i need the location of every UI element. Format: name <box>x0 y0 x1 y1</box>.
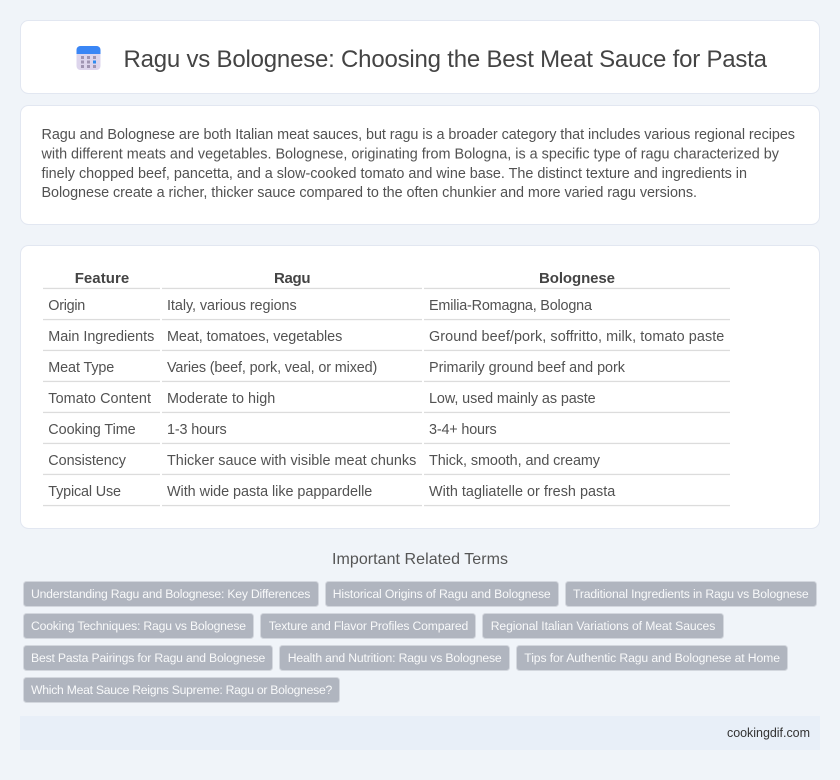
heading: related terms: Important Related Terms <box>332 551 508 568</box>
tag <box>482 614 724 638</box>
row: consistency: Thicker sauce with visible meat chunks <box>167 453 416 469</box>
row: tomato content: Low, used mainly as paste <box>429 391 596 407</box>
tag: Tips for Authentic Ragu and Bolognese at Home <box>524 651 780 665</box>
intro text: Bolognese create a richer, thicker sauce compared to the often chunkier and more varied ragu versions. <box>42 185 697 201</box>
tag: Health and Nutrition: Ragu vs Bolognese <box>288 651 502 665</box>
row: consistency <box>48 453 601 469</box>
table header <box>75 270 615 287</box>
row: main ingredients: Ground beef/pork, soffritto, milk, tomato paste <box>429 329 724 345</box>
row: cooking time: Cooking Time <box>48 422 136 438</box>
row: cooking time: 1-3 hours <box>167 422 227 438</box>
row: main ingredients <box>48 329 724 345</box>
tag <box>24 582 318 606</box>
tag: Historical Origins of Ragu and Bolognese <box>333 587 551 601</box>
intro text: Ragu and Bolognese are both Italian meat sauces, but ragu is a broader category that includes various regional recipes <box>42 127 795 143</box>
panel: header <box>20 20 820 94</box>
tag: Best Pasta Pairings for Ragu and Bolognese <box>31 651 266 665</box>
tag <box>24 646 272 670</box>
row: typical use: Typical Use <box>48 484 121 500</box>
row: tomato content <box>48 391 596 407</box>
row: main ingredients: Meat, tomatoes, vegetables <box>167 329 342 345</box>
tag: Regional Italian Variations of Meat Sauces <box>491 619 715 633</box>
icon: calendar <box>76 46 100 70</box>
row: meat type: Meat Type <box>48 360 114 376</box>
row: meat type: Varies (beef, pork, veal, or mixed) <box>167 360 377 376</box>
intro text: finely chopped beef, pancetta, and a slow-cooked tomato and wine base. The distinct texture and ingredients in <box>42 166 747 182</box>
row: typical use: With wide pasta like pappardelle <box>167 484 372 500</box>
row: origin: Emilia-Romagna, Bologna <box>429 298 592 314</box>
tag: Texture and Flavor Profiles Compared <box>269 619 468 633</box>
footer source: cookingdif.com <box>727 726 810 740</box>
tag: Understanding Ragu and Bolognese: Key Differences <box>31 587 310 601</box>
table header: Feature <box>75 270 129 287</box>
row: origin <box>48 298 592 314</box>
row: origin: Origin <box>48 298 85 314</box>
footer <box>20 716 820 750</box>
row: main ingredients: Main Ingredients <box>48 329 154 345</box>
row: meat type <box>48 360 626 376</box>
tag <box>326 582 558 606</box>
row: tomato content: Tomato Content <box>48 391 151 407</box>
tag <box>260 614 476 638</box>
row: typical use: With tagliatelle or fresh pasta <box>429 484 615 500</box>
table header: Ragu <box>274 270 310 287</box>
row: consistency: Thick, smooth, and creamy <box>429 453 601 469</box>
table header: Bolognese <box>539 270 615 287</box>
panel: introduction <box>20 106 820 224</box>
title: Ragu vs Bolognese: Choosing the Best Meat Sauce for Pasta <box>124 46 768 73</box>
tag: Which Meat Sauce Reigns Supreme: Ragu or Bolognese? <box>31 683 333 697</box>
tag: Cooking Techniques: Ragu vs Bolognese <box>31 619 246 633</box>
panel: comparison table <box>20 246 820 528</box>
row: typical use <box>48 484 615 500</box>
tag <box>24 678 340 702</box>
row: meat type: Primarily ground beef and pork <box>429 360 626 376</box>
row: cooking time: 3-4+ hours <box>429 422 497 438</box>
tag list: related terms <box>24 582 816 702</box>
tag: Traditional Ingredients in Ragu vs Bolognese <box>573 587 809 601</box>
intro text: with different meats and vegetables. Bolognese, originating from Bologna, is a specific type of ragu characterized by <box>40 146 780 162</box>
row: cooking time <box>48 422 497 438</box>
row: origin: Italy, various regions <box>167 298 297 314</box>
tag <box>24 614 254 638</box>
row: tomato content: Moderate to high <box>167 391 275 407</box>
tag <box>566 582 816 606</box>
row: consistency: Consistency <box>48 453 127 469</box>
tag <box>516 646 788 670</box>
intro text <box>40 127 795 201</box>
tag <box>280 646 510 670</box>
